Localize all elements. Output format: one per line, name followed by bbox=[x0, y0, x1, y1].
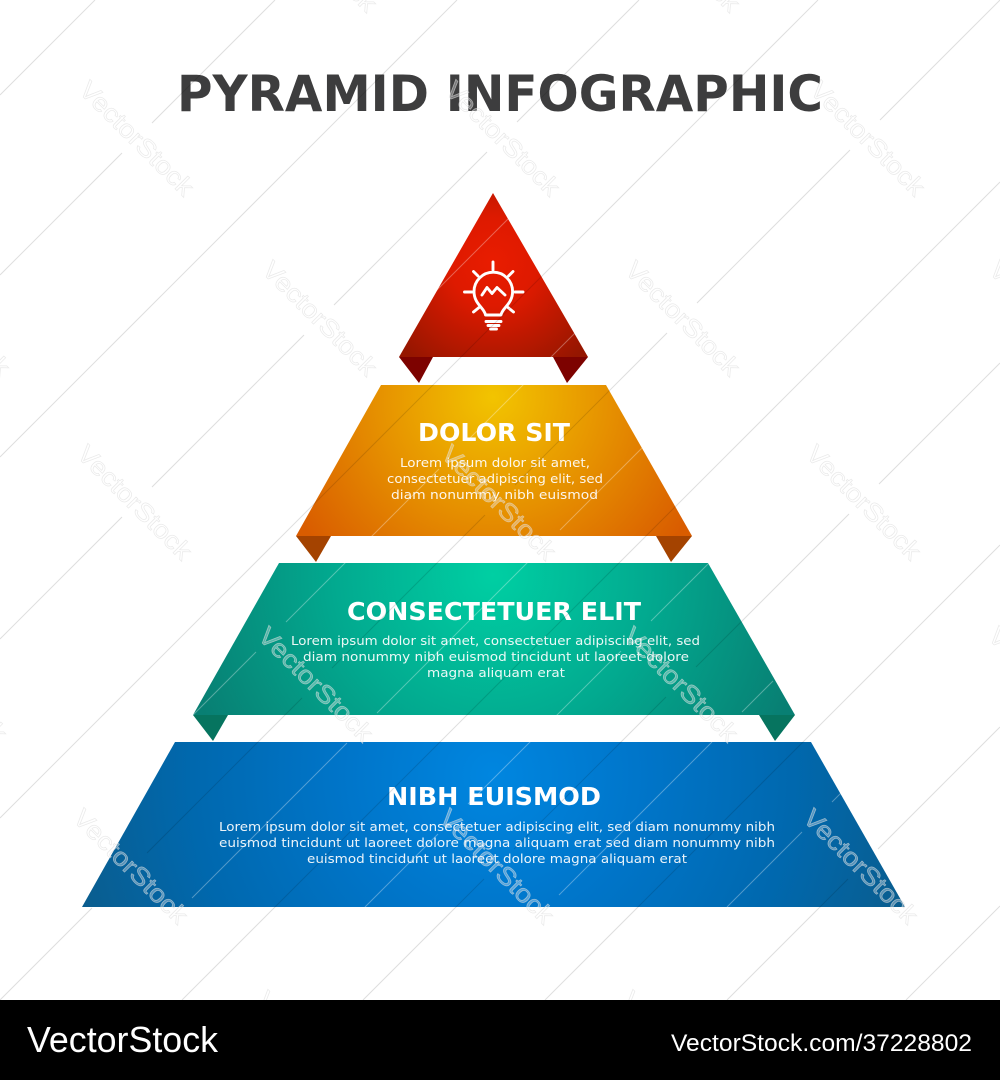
right fold bbox=[553, 357, 588, 383]
body text: Lorem ipsum dolor sit amet, bbox=[400, 455, 590, 470]
pyramid tier 4: blue bbox=[82, 742, 905, 907]
footer image url: VectorStock.com/37228802 bbox=[671, 1030, 972, 1057]
watermarks: VectorStock bbox=[617, 622, 744, 748]
body text bbox=[291, 633, 700, 680]
watermarks: VectorStock bbox=[71, 440, 198, 566]
body text: euismod tincidunt ut laoreet dolore magna aliquam erat bbox=[307, 851, 687, 866]
body text: Lorem ipsum dolor sit amet, consectetuer adipiscing elit, sed diam nonummy nibh bbox=[219, 819, 775, 834]
heading: CONSECTETUER ELIT bbox=[347, 597, 641, 626]
pyramid tier 1: red apex with icon bbox=[399, 193, 588, 383]
pyramid tier 3: green bbox=[193, 563, 795, 741]
body text: Lorem ipsum dolor sit amet, consectetuer adipiscing elit, sed bbox=[291, 633, 700, 648]
orange trapezoid bbox=[296, 385, 692, 536]
body text: magna aliquam erat bbox=[427, 665, 565, 680]
watermarks: VectorStock bbox=[797, 804, 924, 930]
pyramid tier 2: orange bbox=[296, 385, 692, 562]
body text: diam nonummy nibh euismod tincidunt ut laoreet dolore bbox=[303, 649, 689, 664]
left fold bbox=[193, 715, 228, 741]
black band bbox=[0, 1000, 1000, 1080]
body text: consectetuer adipiscing elit, sed bbox=[387, 471, 603, 486]
watermarks: VectorStock bbox=[252, 622, 379, 748]
icon: light bulb bbox=[464, 262, 523, 329]
red triangle bbox=[399, 193, 588, 357]
watermarks: VectorStock bbox=[433, 804, 560, 930]
heading: NIBH EUISMOD bbox=[387, 782, 601, 811]
body text: diam nonummy nibh euismod bbox=[391, 487, 598, 502]
watermarks: VectorStock bbox=[435, 440, 562, 566]
blue trapezoid bbox=[82, 742, 905, 907]
green trapezoid bbox=[193, 563, 795, 715]
body text bbox=[387, 455, 603, 502]
left fold bbox=[296, 536, 331, 562]
watermarks: VectorStock bbox=[619, 256, 746, 382]
body text: euismod tincidunt ut laoreet dolore magna aliquam erat sed diam nonummy nibh bbox=[219, 835, 775, 850]
right fold bbox=[759, 715, 795, 741]
body text bbox=[219, 819, 775, 866]
footer logo text: VectorStock bbox=[27, 1019, 219, 1060]
right fold bbox=[656, 536, 692, 562]
watermarks: VectorStock bbox=[439, 76, 566, 202]
left fold bbox=[399, 357, 433, 383]
watermarks: VectorStock bbox=[67, 804, 194, 930]
watermarks: VectorStock bbox=[800, 440, 927, 566]
watermarks: VectorStock bbox=[256, 256, 383, 382]
heading: DOLOR SIT bbox=[418, 418, 570, 447]
watermarks: VectorStock bbox=[73, 76, 200, 202]
footer bar bbox=[0, 1000, 1000, 1080]
title: PYRAMID INFOGRAPHIC bbox=[177, 65, 823, 123]
watermarks: VectorStock bbox=[804, 76, 931, 202]
